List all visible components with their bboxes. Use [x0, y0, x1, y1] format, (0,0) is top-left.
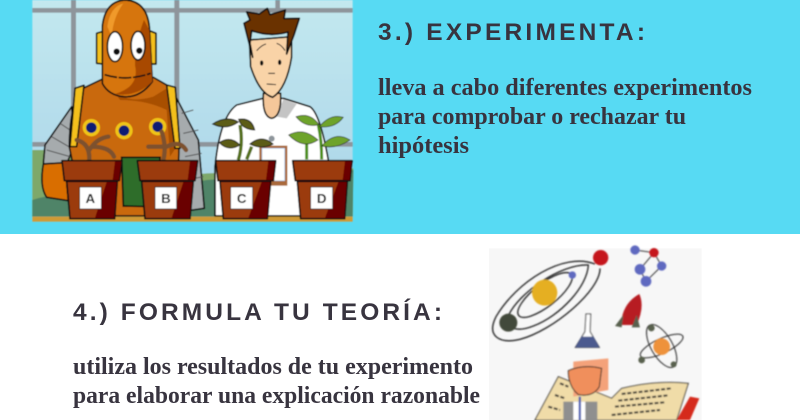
panel: formula tu teoria [0, 234, 800, 420]
illustration: robot and boy with plants [32, 0, 353, 222]
heading: formula tu teoria: 4.) FORMULA TU TEORÍA: [73, 298, 442, 326]
illustration: science book and orbits [489, 245, 702, 420]
text: experimenta description: lleva a cabo diferentes experimentos [378, 75, 752, 101]
shelf [32, 217, 353, 222]
illustration: robot and boy with plants: B [161, 191, 171, 206]
plants [77, 132, 186, 160]
text: experimenta description: para comprobar o rechazar tu [378, 104, 686, 130]
illustration: robot and boy with plants: A [86, 191, 96, 206]
panel: experimenta [0, 0, 800, 234]
boy [215, 8, 328, 216]
pots [62, 161, 352, 219]
illustration: robot and boy with plants: C [237, 191, 247, 206]
text: formula description [73, 354, 480, 409]
illustration: robot and boy with plants: D [317, 191, 327, 206]
heading: experimenta: 3.) EXPERIMENTA: [378, 19, 645, 46]
text: experimenta description: hipótesis [378, 133, 469, 159]
text: experimenta description [378, 75, 752, 159]
watering can [122, 157, 160, 207]
text: formula description: para elaborar una explicación razonable [73, 383, 480, 409]
text: formula description: utiliza los resultados de tu experimento [73, 354, 473, 380]
robot [42, 0, 204, 216]
